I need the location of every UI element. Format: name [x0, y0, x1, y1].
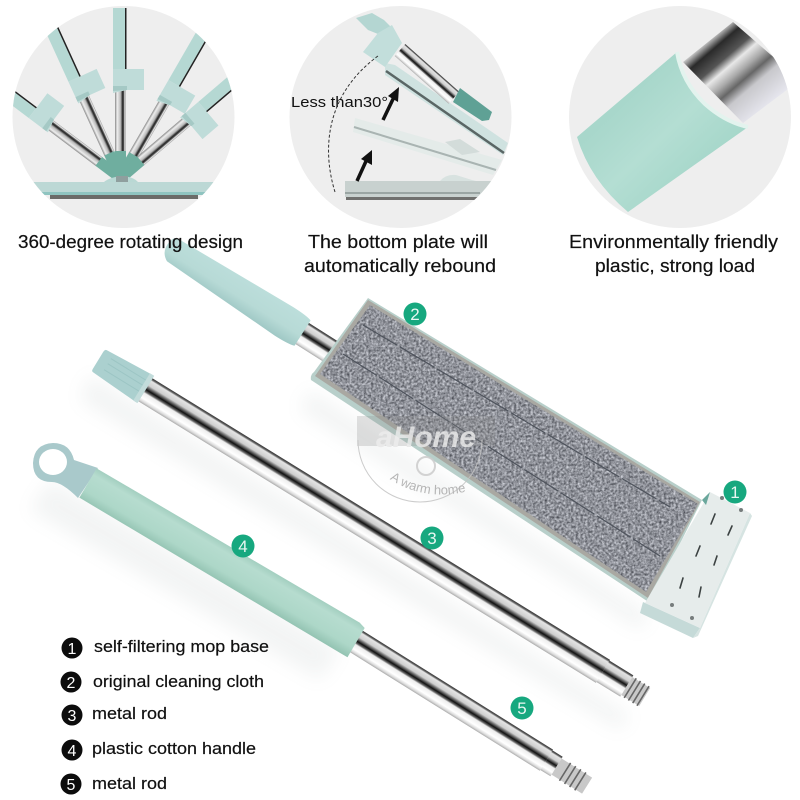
long metal rod with cap	[90, 347, 653, 710]
photo circle background	[569, 6, 791, 228]
badge 4	[232, 534, 254, 558]
numbered badges	[232, 302, 746, 720]
watermark: aHome	[376, 421, 476, 454]
illustration: sleeve and metal rod	[577, 22, 800, 212]
badge 2: 2	[410, 305, 420, 324]
badge 1	[724, 480, 746, 504]
panel: environmentally friendly plastic: plastic, strong load	[595, 256, 755, 276]
badge 1: 1	[730, 483, 740, 502]
arrow: upper	[383, 87, 399, 120]
illustration: bottom plate positions	[345, 13, 508, 200]
photo circle background	[290, 6, 512, 228]
handle with short rod	[157, 232, 348, 371]
badge 3: 3	[427, 529, 437, 548]
cloth seams	[343, 325, 670, 556]
legend item 4: 4	[68, 743, 77, 760]
legend	[60, 638, 269, 794]
legend item 3: metal rod	[92, 705, 167, 723]
panel: 360-degree rotating design	[12, 6, 242, 252]
dashed arc	[329, 56, 378, 192]
watermark	[357, 416, 495, 502]
caption: The bottom plate will	[308, 232, 488, 252]
legend item 4	[62, 740, 256, 760]
illustration: rotating mop poles	[13, 8, 232, 199]
legend item 2	[60, 672, 264, 692]
arrow: lower	[357, 150, 372, 181]
soft shadows	[30, 375, 650, 730]
legend item 1	[62, 638, 269, 658]
mop frame	[311, 298, 702, 603]
legend item 5	[60, 774, 167, 794]
legend item 3: 3	[68, 708, 77, 725]
lower metal rod	[348, 630, 594, 796]
photo circle background	[12, 6, 234, 228]
plastic cotton handle with ring	[33, 443, 366, 657]
mop cloth	[315, 300, 700, 598]
legend item 5: metal rod	[92, 775, 167, 793]
assembled mop	[157, 232, 752, 638]
legend item 5: 5	[67, 777, 76, 794]
angle label: Less than30°	[291, 94, 388, 111]
legend item 3	[62, 704, 167, 726]
legend item 2: original cleaning cloth	[93, 673, 264, 691]
panel: automatic rebound	[290, 6, 512, 276]
panel: automatic rebound: automatically rebound	[304, 256, 496, 276]
badge 5: 5	[517, 699, 527, 718]
legend item 1: self-filtering mop base	[94, 638, 269, 656]
legend item 1: 1	[68, 641, 77, 658]
self-filtering base plate	[640, 492, 752, 638]
panel: environmentally friendly plastic	[569, 6, 800, 276]
badge 5	[510, 696, 534, 720]
watermark: A warm home	[390, 474, 465, 494]
badge 3	[420, 526, 444, 550]
caption: 360-degree rotating design	[18, 232, 243, 252]
caption: Environmentally friendly	[569, 232, 778, 252]
legend item 4: plastic cotton handle	[92, 740, 256, 758]
badge 2	[404, 302, 426, 326]
legend item 2: 2	[67, 675, 76, 692]
badge 4: 4	[238, 537, 248, 556]
